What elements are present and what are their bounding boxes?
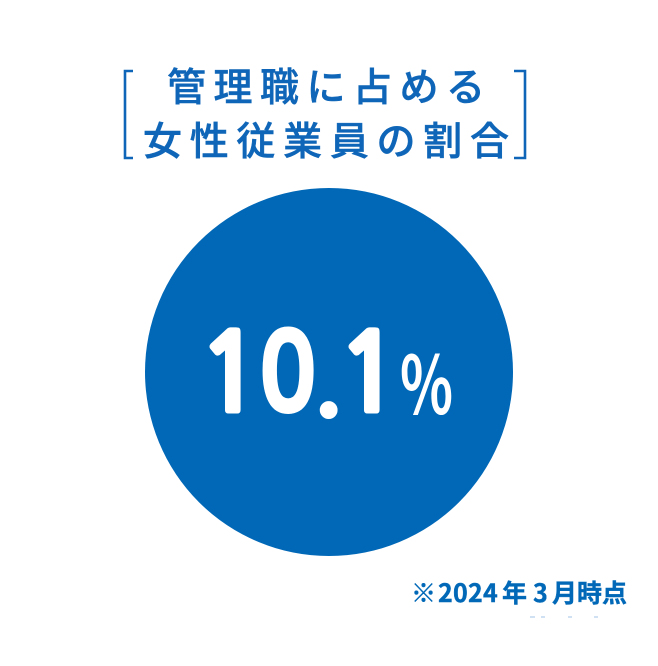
number: 10.1 <box>198 321 402 428</box>
blue circle <box>145 188 513 556</box>
percent sign: % <box>400 322 453 438</box>
number: 10.1: 1 <box>198 321 263 428</box>
title with brackets <box>125 57 525 167</box>
title line 1: 管理職に占める <box>167 57 485 113</box>
right bracket <box>514 71 525 158</box>
faint marks <box>530 616 598 618</box>
percentage value <box>198 321 453 438</box>
footnote: ※2024年3月時点 <box>411 574 627 610</box>
left bracket <box>125 71 133 158</box>
number: 10.1: 1 <box>337 321 402 428</box>
number: 10.1: 0 <box>259 321 317 428</box>
title line 2: 女性従業員の割合 <box>143 111 509 167</box>
number: 10.1: . <box>314 336 342 425</box>
